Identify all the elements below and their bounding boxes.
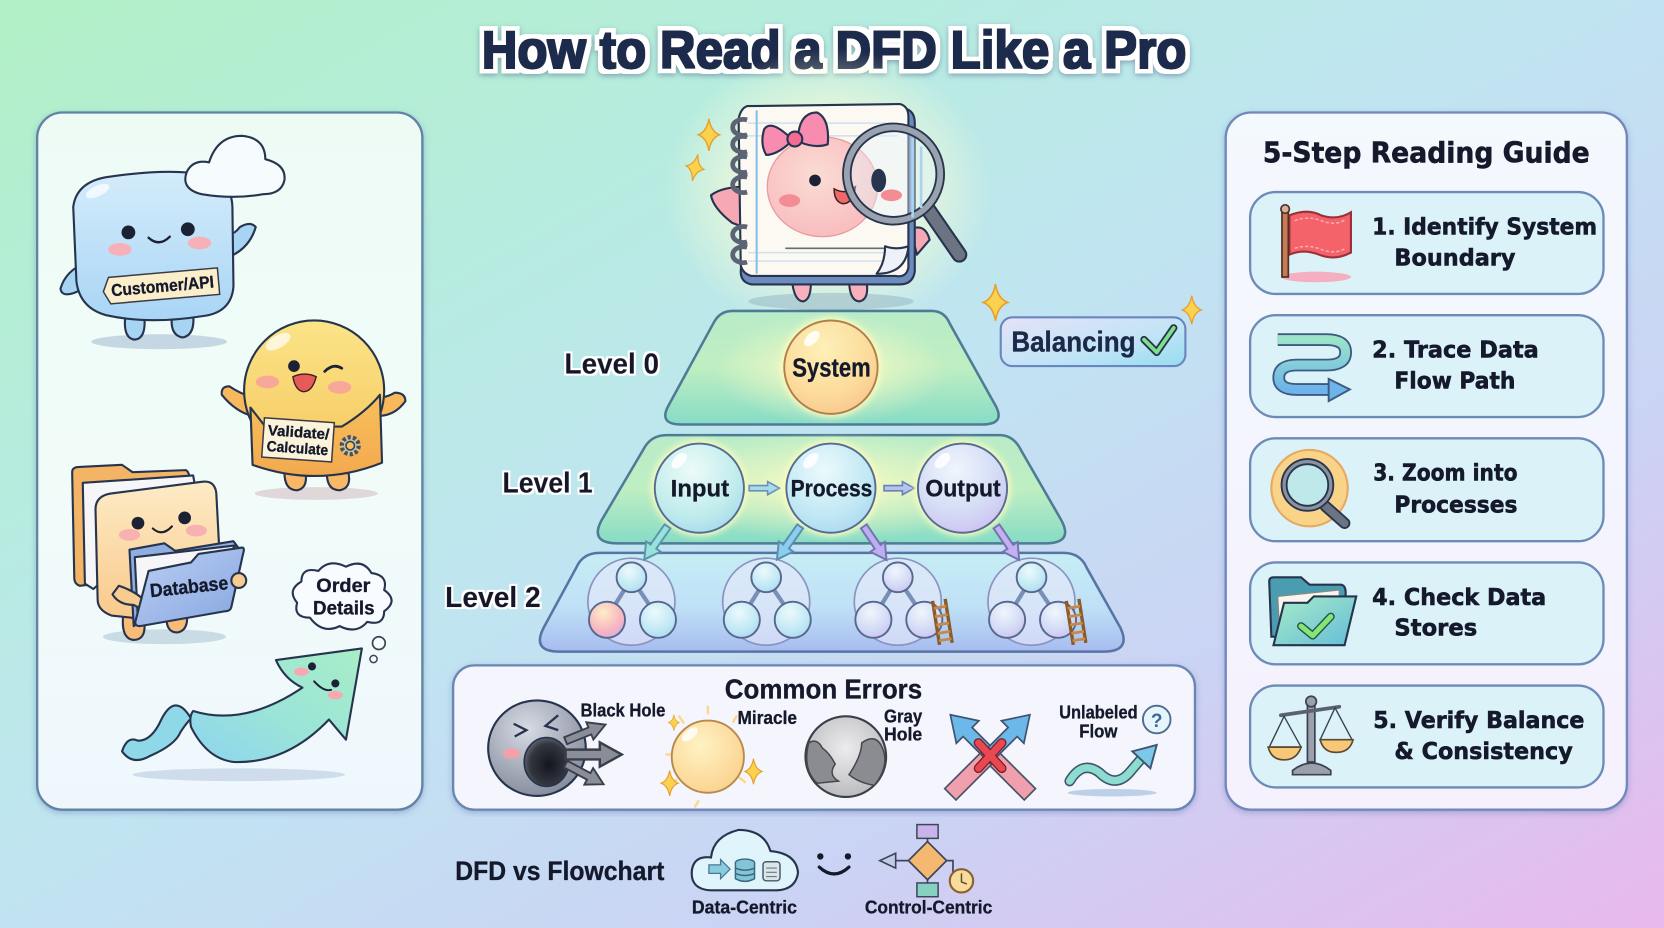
folder: Database: [135, 548, 244, 626]
heading: DFD vs Flowchart: [455, 856, 664, 886]
label: Validate/Calculate: Calculate: [266, 439, 329, 459]
icon: magnifier: [1271, 450, 1348, 526]
error: Gray Hole: [805, 707, 922, 797]
cluster: sub-process 4: [988, 558, 1086, 645]
error: Gray Hole: Gray: [884, 707, 922, 727]
bubble: Output: [915, 440, 1010, 536]
bubble: Process: Process: [791, 476, 872, 503]
level 0 tier: [665, 311, 999, 424]
panel: Common Errors: [453, 665, 1195, 810]
label: Data-Centric: Data-Centric: [692, 898, 797, 918]
label: Level 1: Level 1: [502, 467, 593, 499]
step 2: Flow Path: [1394, 366, 1515, 394]
icon: flag: [1281, 205, 1351, 282]
icon: cloud: [185, 136, 285, 197]
folder: Database: Database: [149, 573, 229, 602]
character: process: [222, 320, 405, 500]
step 5: & Consistency: [1394, 737, 1573, 765]
panel: DFD elements: [37, 112, 422, 810]
error: Gray Hole: Hole: [884, 725, 922, 745]
step 1: 1. Identify System: [1372, 213, 1597, 241]
arrow: Input to Process: [749, 482, 779, 495]
cluster: sub-process 1: [588, 558, 676, 645]
icon: winding path arrow: [1278, 340, 1350, 401]
bubble: System: [781, 317, 881, 417]
step 1: Boundary: [1394, 243, 1515, 271]
icon: control-centric flowchart: [880, 825, 973, 897]
arrows: level 1 to level 2: [637, 521, 1026, 565]
bubble: Process: [783, 440, 879, 536]
pyramid: DFD levels: [540, 311, 1124, 652]
icon: gear: [342, 437, 359, 454]
bubble: Input: [652, 440, 747, 536]
cluster: sub-process 2: [723, 558, 811, 645]
error: Unlabeled Flow: Unlabeled: [1059, 702, 1138, 722]
icon: smiley: [817, 853, 851, 874]
icon: sparkles: [683, 119, 720, 183]
cluster: sub-process 3: [854, 558, 952, 645]
step 4: Stores: [1394, 614, 1477, 642]
error: Miracle: Miracle: [738, 708, 797, 728]
bubble: Input: Input: [671, 476, 729, 503]
heading: 5-Step Reading Guide: [1263, 135, 1590, 169]
panel: 5-Step Reading Guide: [1226, 112, 1627, 810]
step 3: Processes: [1394, 491, 1518, 519]
character: data flow arrow: [122, 637, 385, 781]
arrow: Process to Output: [884, 482, 914, 495]
error: Unlabeled Flow: [1059, 702, 1171, 796]
icon: folder with check: [1269, 577, 1356, 645]
callout: Order Details: [293, 563, 392, 630]
error: Unlabeled Flow: ?: [1151, 711, 1163, 732]
label: Level 2: Level 2: [445, 582, 541, 614]
label: Validate/Calculate: Validate/: [267, 423, 330, 443]
step 5: 5. Verify Balance: [1373, 706, 1584, 734]
error: Black Hole: Black Hole: [580, 700, 665, 720]
level 1 tier: [598, 431, 1065, 543]
heading: Common Errors: [725, 673, 922, 704]
label: Validate/Calculate: [262, 418, 334, 462]
icon: balance scale: [1268, 696, 1353, 775]
step 4: 4. Check Data: [1372, 583, 1546, 611]
error: Black Hole: [488, 700, 665, 796]
step 5: [1250, 686, 1604, 787]
character: notebook with magnifier: [663, 48, 992, 334]
icon: sparkles: [983, 284, 1201, 324]
step 3: [1250, 438, 1604, 541]
bubble: System: System: [792, 355, 871, 383]
callout: Order Details: Order: [316, 576, 371, 597]
badge: Balancing: Balancing: [1011, 326, 1136, 358]
step 2: 2. Trace Data: [1372, 336, 1539, 364]
title: How to Read a DFD Like a Pro: [482, 21, 1186, 80]
icon: check mark: [1144, 328, 1174, 352]
bubble: Output: Output: [925, 476, 1001, 503]
error: Unlabeled Flow: Flow: [1079, 722, 1118, 742]
character: data store: [72, 465, 246, 644]
step 3: 3. Zoom into: [1373, 459, 1518, 487]
level 2 tier: [540, 553, 1124, 652]
icon: spiral rings: [733, 119, 747, 263]
label: Control-Centric: Control-Centric: [865, 898, 992, 918]
label: Customer/API: Customer/API: [110, 272, 215, 300]
comparison: DFD vs Flowchart: [455, 825, 992, 918]
badge: Balancing: [983, 284, 1201, 366]
step 1: [1250, 192, 1604, 294]
step 4: [1250, 562, 1604, 664]
icon: magnifying glass: [847, 127, 959, 255]
label: Level 0: Level 0: [565, 349, 659, 381]
step 2: [1250, 315, 1604, 417]
error: Miracle: [661, 707, 797, 807]
icon: data-centric cloud: [692, 830, 798, 890]
callout: Order Details: Details: [313, 598, 375, 619]
error: crossed flows: [939, 704, 1041, 806]
icon: bow: [762, 112, 828, 155]
character: external entity: [60, 136, 285, 349]
